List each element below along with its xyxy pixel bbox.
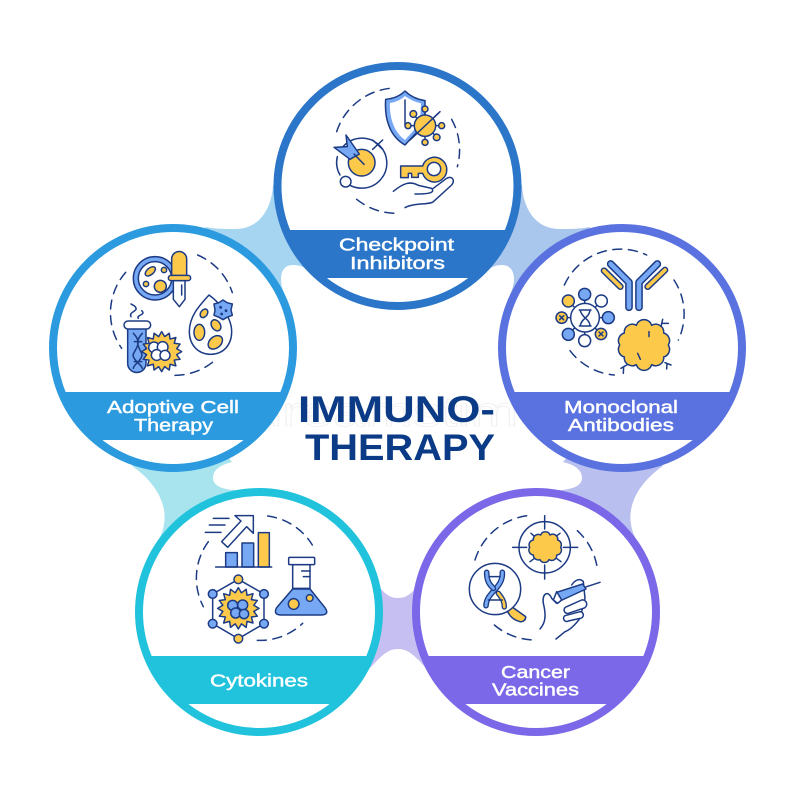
- ring: checkpoint inhibitors: [278, 66, 518, 306]
- icon: bar chart: [216, 533, 272, 567]
- label: monoclonal antibodies: Antibodies: [568, 415, 674, 435]
- icon group: checkpoint inhibitors: [334, 88, 460, 213]
- icon: petri dish: [133, 257, 177, 300]
- band: cancer vaccines: [428, 656, 644, 704]
- icon: hand with syringe: [540, 580, 600, 639]
- label: adoptive cell therapy: Adoptive Cell: [107, 397, 239, 417]
- ring: cancer vaccines: [416, 492, 656, 732]
- icon group: cancer vaccines: [469, 516, 600, 640]
- icon: target with dart: [334, 135, 387, 188]
- label: cytokines: Cytokines: [210, 670, 308, 690]
- icon: dna magnifier: [469, 563, 526, 622]
- icon group: monoclonal antibodies: [556, 249, 684, 375]
- band: adoptive cell therapy: [66, 392, 280, 440]
- label: checkpoint inhibitors: Inhibitors: [350, 253, 445, 273]
- label: cancer vaccines: Cancer: [501, 662, 570, 682]
- panel: cancer vaccines: [410, 492, 665, 732]
- label: checkpoint inhibitors: Checkpoint: [339, 234, 454, 254]
- icon: shield: [385, 91, 425, 145]
- icon: virus: [405, 106, 445, 145]
- icon group: adoptive cell therapy: [110, 251, 232, 375]
- connector: right to cancer vaccines: [533, 400, 663, 560]
- icon group: cytokines: [196, 516, 327, 643]
- icon: drop of cells: [189, 295, 232, 354]
- icon: cell network: [556, 288, 614, 347]
- ring: adoptive cell therapy: [53, 228, 293, 468]
- connector: left to cytokines: [132, 400, 262, 560]
- title: THERAPY: [305, 426, 495, 468]
- title: [298, 388, 495, 468]
- icon: tumor in crosshair: [513, 516, 578, 579]
- label: cancer vaccines: Vaccines: [492, 680, 579, 700]
- icon: growth arrow: [222, 516, 253, 547]
- label: adoptive cell therapy: [107, 397, 239, 435]
- icon: hexagon network: [208, 575, 268, 643]
- icon: test tube: [124, 304, 151, 372]
- panel: cytokines: [130, 492, 385, 732]
- icon: antibody: [604, 264, 665, 307]
- ring: monoclonal antibodies: [502, 228, 742, 468]
- band: checkpoint inhibitors: [290, 230, 505, 278]
- band: cytokines: [152, 656, 366, 704]
- panel: monoclonal antibodies: [495, 228, 750, 468]
- band: monoclonal antibodies: [514, 392, 730, 440]
- icon: dropper: [168, 251, 191, 307]
- label: cancer vaccines: [492, 662, 579, 700]
- icon: spiky cell: [142, 332, 182, 372]
- icon: flask: [275, 557, 327, 615]
- icon: tumor: [618, 319, 671, 373]
- title: IMMUNO-: [298, 388, 495, 430]
- connector: top to right: [455, 185, 590, 300]
- icon: key: [401, 157, 447, 182]
- label: monoclonal antibodies: [564, 397, 678, 435]
- connector: cytokines to cancer vaccines: [350, 584, 440, 668]
- icon: speed lines: [205, 518, 229, 532]
- panel: checkpoint inhibitors: [270, 66, 525, 306]
- watermark: dreamstime: [250, 388, 550, 435]
- label: checkpoint inhibitors: [339, 234, 454, 273]
- connector: top to left: [205, 185, 340, 300]
- panel: adoptive cell therapy: [45, 228, 300, 468]
- label: adoptive cell therapy: Therapy: [134, 415, 213, 435]
- icon: hand: [393, 177, 453, 208]
- ring: cytokines: [139, 492, 379, 732]
- label: monoclonal antibodies: Monoclonal: [564, 397, 678, 417]
